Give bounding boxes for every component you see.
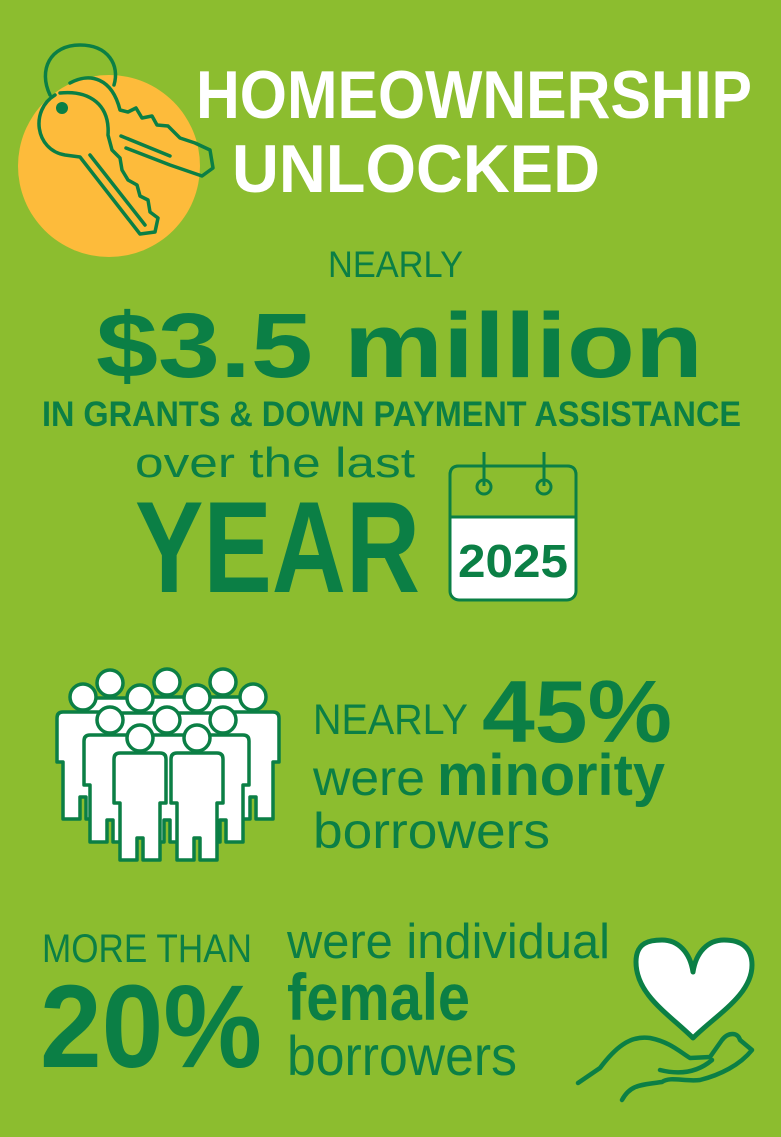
title: UNLOCKED bbox=[232, 131, 600, 207]
stat: 45% minority borrowers: were bbox=[312, 750, 425, 806]
icon: keys on orange circle bbox=[18, 45, 213, 257]
stat: 45% minority borrowers: borrowers bbox=[313, 803, 550, 859]
stat: 45% minority borrowers: minority bbox=[437, 743, 665, 808]
stat: 20% female borrowers bbox=[40, 915, 610, 1093]
icon: calendar 2025: 2025 bbox=[458, 535, 568, 587]
stat: 20% female borrowers: were individual bbox=[286, 915, 610, 969]
stat: 3.5 million: over the last bbox=[135, 439, 415, 486]
stat: 20% female borrowers: MORE THAN bbox=[42, 927, 252, 971]
stat: 3.5 million bbox=[42, 244, 741, 620]
icon: heart in hand bbox=[578, 940, 752, 1100]
stat: 3.5 million: IN GRANTS & DOWN PAYMENT ASSISTANCE bbox=[42, 395, 741, 434]
stat: 20% female borrowers: 20% bbox=[40, 961, 262, 1093]
stat: 20% female borrowers: female bbox=[287, 960, 470, 1034]
stat: 45% minority borrowers: 45% bbox=[482, 662, 672, 761]
icon: calendar 2025 bbox=[450, 452, 576, 600]
icon: group of people bbox=[57, 669, 279, 860]
stat: 20% female borrowers: borrowers bbox=[287, 1024, 517, 1087]
stat: 45% minority borrowers bbox=[312, 662, 672, 859]
stat: 3.5 million: YEAR bbox=[135, 474, 420, 620]
stat: 3.5 million: $3.5 million bbox=[96, 295, 703, 397]
stat: 45% minority borrowers: NEARLY bbox=[313, 696, 468, 744]
title bbox=[196, 57, 752, 207]
stat: 3.5 million: NEARLY bbox=[328, 244, 463, 285]
